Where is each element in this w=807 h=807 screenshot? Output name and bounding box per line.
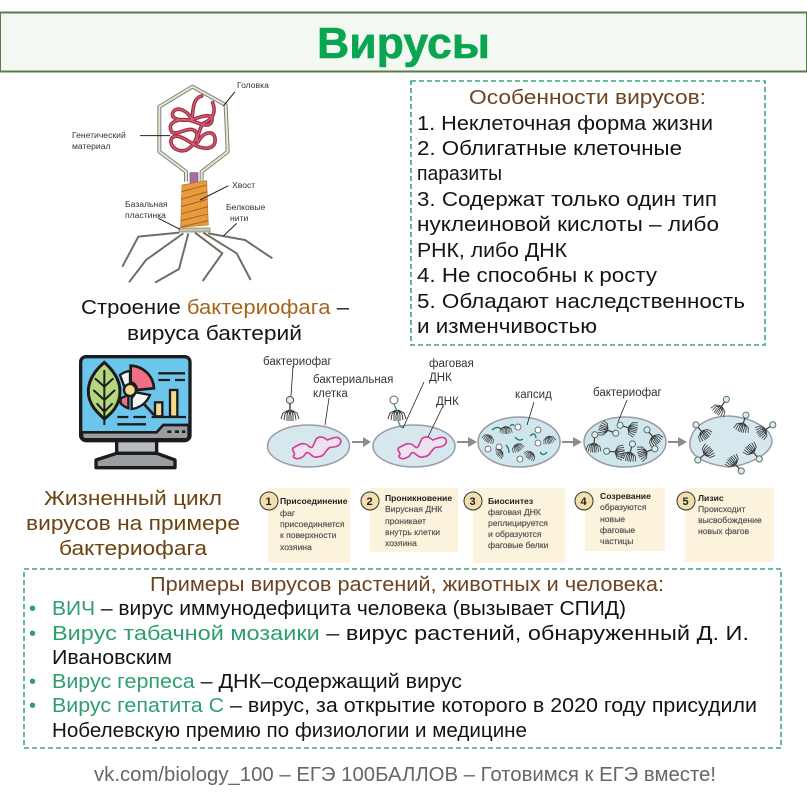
panel: features of viruses <box>411 81 765 345</box>
step card 3: фаговая ДНК <box>488 507 541 517</box>
features list: 5. Обладают наследственность <box>417 291 745 313</box>
step card 4: частицы <box>600 536 633 546</box>
step 5 lysing cell <box>688 392 780 478</box>
examples bullet markers: • <box>29 623 36 645</box>
icon: phage head <box>159 87 228 182</box>
heading: virus life cycle: вирусов на примере <box>26 513 240 535</box>
step card 1: к поверхности <box>280 530 337 540</box>
examples list: Вирус герпеса – ДНК–содержащий вирус <box>52 671 462 693</box>
title: Вирусы <box>317 19 490 68</box>
icon: base plate <box>179 228 210 232</box>
examples heading: Примеры вирусов растений, животных и человека: <box>150 574 664 596</box>
examples bullet markers: • <box>29 695 36 717</box>
heading: virus life cycle: Жизненный цикл <box>44 488 222 510</box>
step card 5: Лизис <box>698 493 724 503</box>
step card 3: реплицируется <box>488 518 548 528</box>
icon: tail sheath <box>181 181 208 227</box>
icon: inner tube <box>190 173 198 183</box>
step 3 cell <box>478 417 560 467</box>
features list: РНК, либо ДНК <box>417 240 567 262</box>
examples list: Ивановским <box>52 647 172 669</box>
diagram labels: пластинка <box>125 210 166 220</box>
panel: virus examples <box>24 569 781 748</box>
step card 4: фаговые <box>600 525 635 535</box>
step card 2: 2 <box>366 496 373 508</box>
features list: нуклеиновой кислоты – либо <box>417 214 719 236</box>
diagram labels: Головка <box>237 80 269 90</box>
features list <box>417 113 745 338</box>
diagram labels: нити <box>230 213 248 223</box>
step card 3: Биосинтез <box>488 496 533 506</box>
diagram labels: бактериофаг <box>263 356 332 368</box>
examples list <box>52 598 757 742</box>
diagram labels: фаговая <box>429 358 474 370</box>
step card 5: 5 <box>682 496 689 508</box>
step card 2: хозяина <box>385 538 417 548</box>
features list: 1. Неклеточная форма жизни <box>417 113 713 135</box>
diagram labels: Генетический <box>72 130 126 140</box>
step card 1: 1 <box>266 496 272 508</box>
examples list: Вирус гепатита С – вирус, за открытие которого в 2020 году присудили <box>52 695 757 717</box>
examples bullet markers: • <box>29 598 36 620</box>
diagram labels: бактериофаг <box>593 387 662 399</box>
diagram labels <box>263 356 662 437</box>
step card 4: образуются <box>600 502 647 512</box>
examples list: Нобелевскую премию по физиологии и медицине <box>52 720 527 742</box>
step card 2: Проникновение <box>385 493 452 503</box>
diagram labels: Белковые <box>226 202 266 212</box>
step card 3: 3 <box>470 496 476 508</box>
step card 3 <box>464 488 565 563</box>
diagram labels: ДНК <box>436 396 459 408</box>
examples list: Вирус табачной мозаики – вирус растений, обнаруженный Д. И. <box>52 623 749 645</box>
diagram labels: Хвост <box>232 180 255 190</box>
step card 5: новых фагов <box>698 526 750 536</box>
caption: bacteriophage structure: вируса бактерий <box>127 323 302 345</box>
title banner <box>0 12 807 72</box>
step card 4 <box>575 488 665 551</box>
diagram labels: Базальная <box>125 199 168 209</box>
examples list: ВИЧ – вирус иммунодефицита человека (вызывает СПИД) <box>52 598 626 620</box>
step card 1: фаг <box>280 508 295 518</box>
step card 2: Вирусная ДНК <box>385 504 442 514</box>
leader lines <box>140 92 237 236</box>
icon: phage legs <box>122 233 272 283</box>
examples bullet markers <box>29 598 36 717</box>
step card 4: Созревание <box>600 491 651 501</box>
life cycle diagram <box>260 356 780 563</box>
step card 3: фаговые белки <box>488 540 549 550</box>
features list: паразиты <box>417 163 502 185</box>
step card 5: высвобождение <box>698 515 762 525</box>
features list: и изменчивостью <box>417 316 597 338</box>
arrows between stages <box>352 437 687 447</box>
heading: virus life cycle: бактериофага <box>59 538 208 560</box>
step card 3: и образуются <box>488 529 542 539</box>
step card 2: проникает <box>385 516 426 526</box>
diagram labels: материал <box>72 141 110 151</box>
diagram labels: клетка <box>313 388 348 400</box>
step card 1: хозяина <box>280 542 312 552</box>
step 4 cell <box>584 417 666 467</box>
step card 5 <box>677 488 774 562</box>
icon: computer monitor with leaf and charts <box>81 357 190 468</box>
caption: bacteriophage structure: Строение бактериофага – <box>81 297 350 319</box>
examples bullet markers: • <box>29 671 36 693</box>
features list: 2. Облигатные клеточные <box>417 138 682 160</box>
step 2 cell <box>373 396 455 467</box>
diagram labels: бактериальная <box>313 374 393 386</box>
footer credit: vk.com/biology_100 – ЕГЭ 100БАЛЛОВ – Готовимся к ЕГЭ вместе! <box>94 764 716 786</box>
features list: 3. Содержат только один тип <box>417 189 717 211</box>
step card 1: присоединяется <box>280 519 345 529</box>
step card 2 <box>361 488 458 552</box>
bacteriophage structure diagram <box>72 80 272 283</box>
caption: bacteriophage structure <box>81 297 350 345</box>
diagram labels: ДНК <box>429 372 452 384</box>
features list: 4. Не способны к росту <box>417 265 657 287</box>
step 1 cell <box>268 396 350 467</box>
step card 1: Присоединение <box>280 496 348 506</box>
step card 4: новые <box>600 514 625 524</box>
diagram labels: капсид <box>515 389 552 401</box>
icon: genetic material <box>170 96 215 151</box>
step card 2: внутрь клетки <box>385 527 440 537</box>
features heading: Особенности вирусов: <box>469 87 706 109</box>
step card 4: 4 <box>580 496 588 508</box>
heading: virus life cycle <box>26 488 240 560</box>
diagram labels <box>72 80 269 223</box>
step card 5: Происходит <box>698 504 745 514</box>
step card 1 <box>260 488 350 563</box>
